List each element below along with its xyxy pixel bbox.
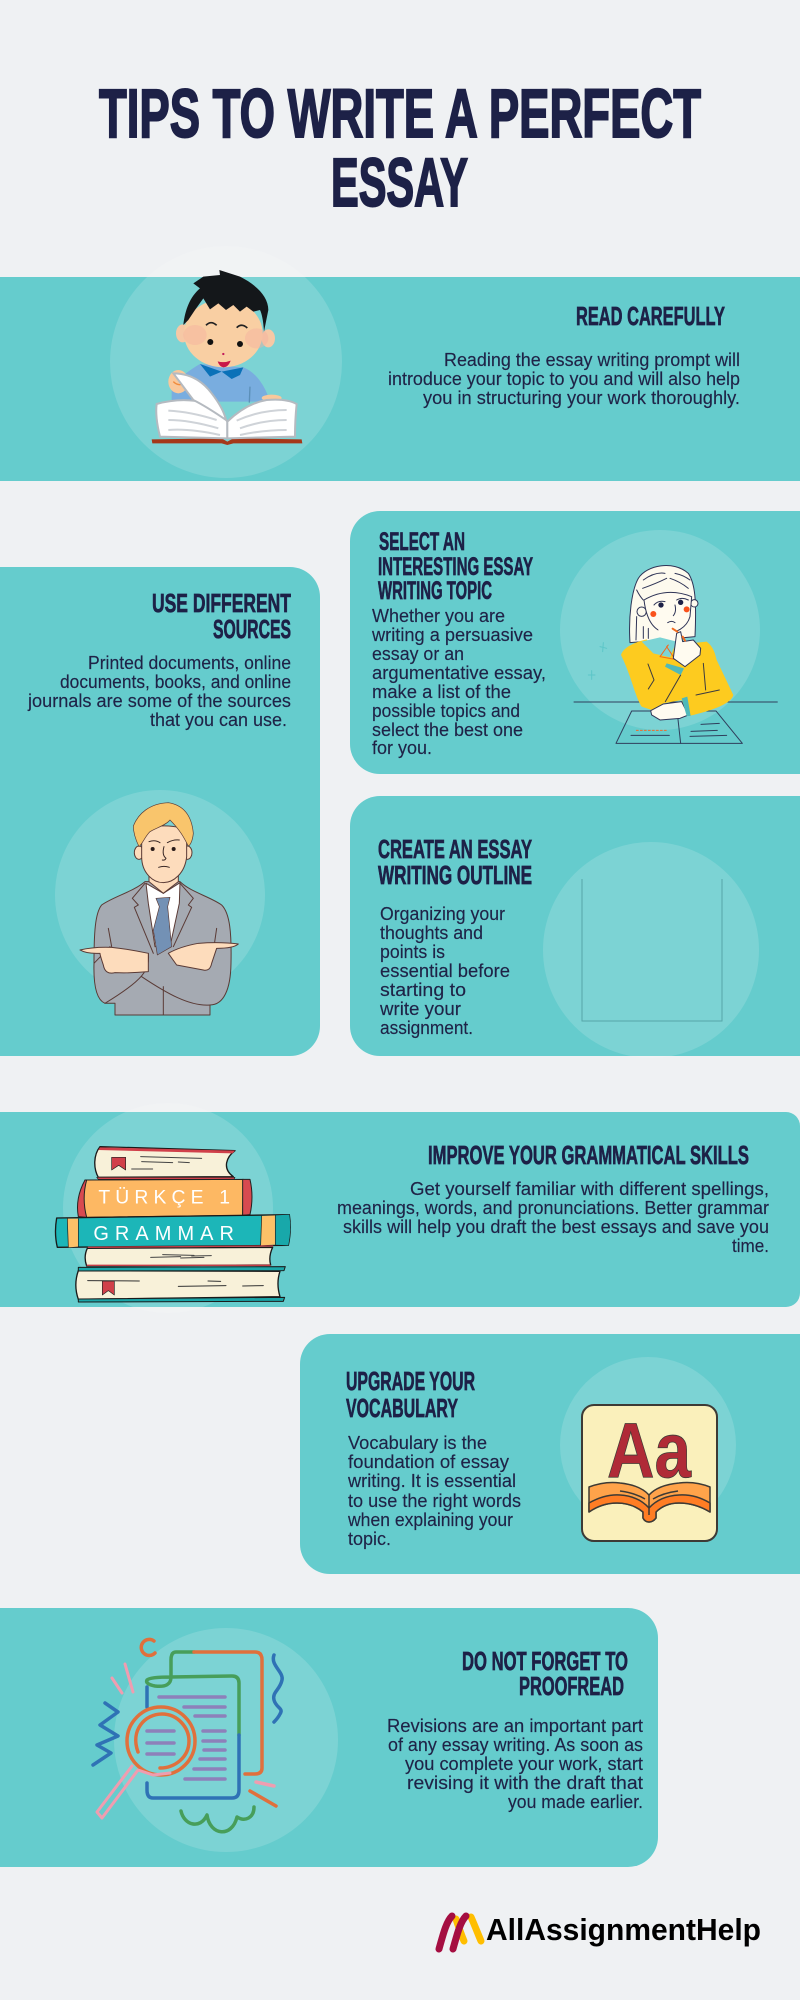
icon: Aa card with open book xyxy=(582,1405,717,1541)
text: select topic body: select the best one xyxy=(372,719,523,740)
logo: AllAssignmentHelp: AllAssignmentHelp xyxy=(486,1912,761,1947)
heading: vocabulary xyxy=(346,1366,475,1423)
text: proofread body xyxy=(387,1715,643,1812)
panel: improve grammar xyxy=(0,1103,800,1313)
heading: select topic: INTERESTING ESSAY xyxy=(378,553,533,581)
heading: vocabulary: VOCABULARY xyxy=(346,1393,458,1423)
icon: businessman with crossed arms xyxy=(80,803,238,1015)
text: outline body: write your xyxy=(379,998,461,1019)
text: proofread body: you complete your work, start xyxy=(405,1753,643,1774)
text: outline body: Organizing your xyxy=(380,903,505,924)
text: grammar body: meanings, words, and pronunciations. Better grammar xyxy=(337,1197,769,1218)
text: vocabulary body: writing. It is essential xyxy=(347,1470,516,1491)
icon: logo mark xyxy=(439,1916,481,1949)
text: read carefully body xyxy=(388,349,740,408)
heading: proofread: DO NOT FORGET TO xyxy=(462,1646,628,1676)
title xyxy=(99,75,701,221)
text: vocabulary body xyxy=(347,1432,521,1549)
text: proofread body: revising it with the draft that xyxy=(407,1772,643,1793)
text: sources body xyxy=(27,652,291,730)
panel: proofread xyxy=(0,1608,658,1867)
icon: magnifier over document xyxy=(93,1639,282,1832)
icon: Aa card with open book: Aa xyxy=(607,1406,692,1494)
panel: select a topic xyxy=(350,511,800,774)
heading: use different sources: SOURCES xyxy=(213,614,291,644)
text: sources body: documents, books, and online xyxy=(60,671,291,692)
text: outline body: thoughts and xyxy=(380,922,483,943)
text: select topic body: writing a persuasive xyxy=(371,624,533,645)
heading: proofread: PROOFREAD xyxy=(519,1671,624,1701)
text: grammar body xyxy=(337,1178,769,1256)
text: proofread body: Revisions are an important part xyxy=(387,1715,643,1736)
text: select topic body: essay or an xyxy=(372,643,464,664)
text: proofread body: of any essay writing. As soon as xyxy=(388,1734,643,1755)
text: sources body: Printed documents, online xyxy=(88,652,291,673)
text: outline body: assignment. xyxy=(380,1017,473,1038)
heading: select topic: SELECT AN xyxy=(379,528,465,556)
icon: stack of books xyxy=(55,1147,290,1302)
heading: use different sources: USE DIFFERENT xyxy=(152,588,291,618)
text: outline body xyxy=(379,903,510,1038)
panel: use different sources xyxy=(0,567,320,1056)
text: read carefully body: introduce your topic to you and will also help xyxy=(388,368,740,389)
text: vocabulary body: when explaining your xyxy=(347,1509,513,1530)
text: outline body: points is xyxy=(380,941,445,962)
text: grammar body: skills will help you draft the best essays and save you xyxy=(343,1216,769,1237)
panel: read carefully xyxy=(0,246,800,481)
text: vocabulary body: to use the right words xyxy=(348,1490,521,1511)
icon: stack of books: GRAMMAR xyxy=(93,1223,234,1245)
icon: stack of books: TÜRKÇE 1 xyxy=(98,1186,230,1208)
text: select topic body: Whether you are xyxy=(372,605,505,626)
icon: boy reading book xyxy=(152,270,302,445)
text: grammar body: time. xyxy=(732,1235,769,1256)
heading: outline: CREATE AN ESSAY xyxy=(378,834,532,864)
text: select topic body xyxy=(371,605,546,758)
icon: thinking girl at desk xyxy=(574,565,777,743)
heading: select topic: WRITING TOPIC xyxy=(378,577,492,605)
text: select topic body: possible topics and xyxy=(372,700,520,721)
icon: empty outline frame xyxy=(582,879,722,1021)
text: outline body: starting to xyxy=(380,979,466,1000)
text: grammar body: Get yourself familiar with different spellings, xyxy=(410,1178,769,1199)
text: vocabulary body: foundation of essay xyxy=(348,1451,510,1472)
panel: create an outline xyxy=(350,796,800,1058)
text: proofread body: you made earlier. xyxy=(508,1791,643,1812)
heading: proofread xyxy=(462,1646,628,1701)
text: read carefully body: Reading the essay writing prompt will xyxy=(444,349,740,370)
text: outline body: essential before xyxy=(380,960,510,981)
heading: use different sources xyxy=(152,588,291,644)
text: select topic body: make a list of the xyxy=(372,681,511,702)
heading: vocabulary: UPGRADE YOUR xyxy=(346,1366,475,1396)
text: select topic body: for you. xyxy=(372,737,432,758)
heading: outline xyxy=(378,834,532,890)
text: sources body: that you can use. xyxy=(150,709,287,730)
text: sources body: journals are some of the sources xyxy=(27,690,291,711)
text: read carefully body: you in structuring your work thoroughly. xyxy=(423,387,740,408)
text: select topic body: argumentative essay, xyxy=(372,662,546,683)
panel: upgrade vocabulary xyxy=(300,1334,800,1574)
heading: select topic xyxy=(378,528,533,605)
text: vocabulary body: topic. xyxy=(348,1528,391,1549)
heading: outline: WRITING OUTLINE xyxy=(378,860,532,890)
title: ESSAY xyxy=(331,144,468,221)
text: vocabulary body: Vocabulary is the xyxy=(348,1432,487,1453)
